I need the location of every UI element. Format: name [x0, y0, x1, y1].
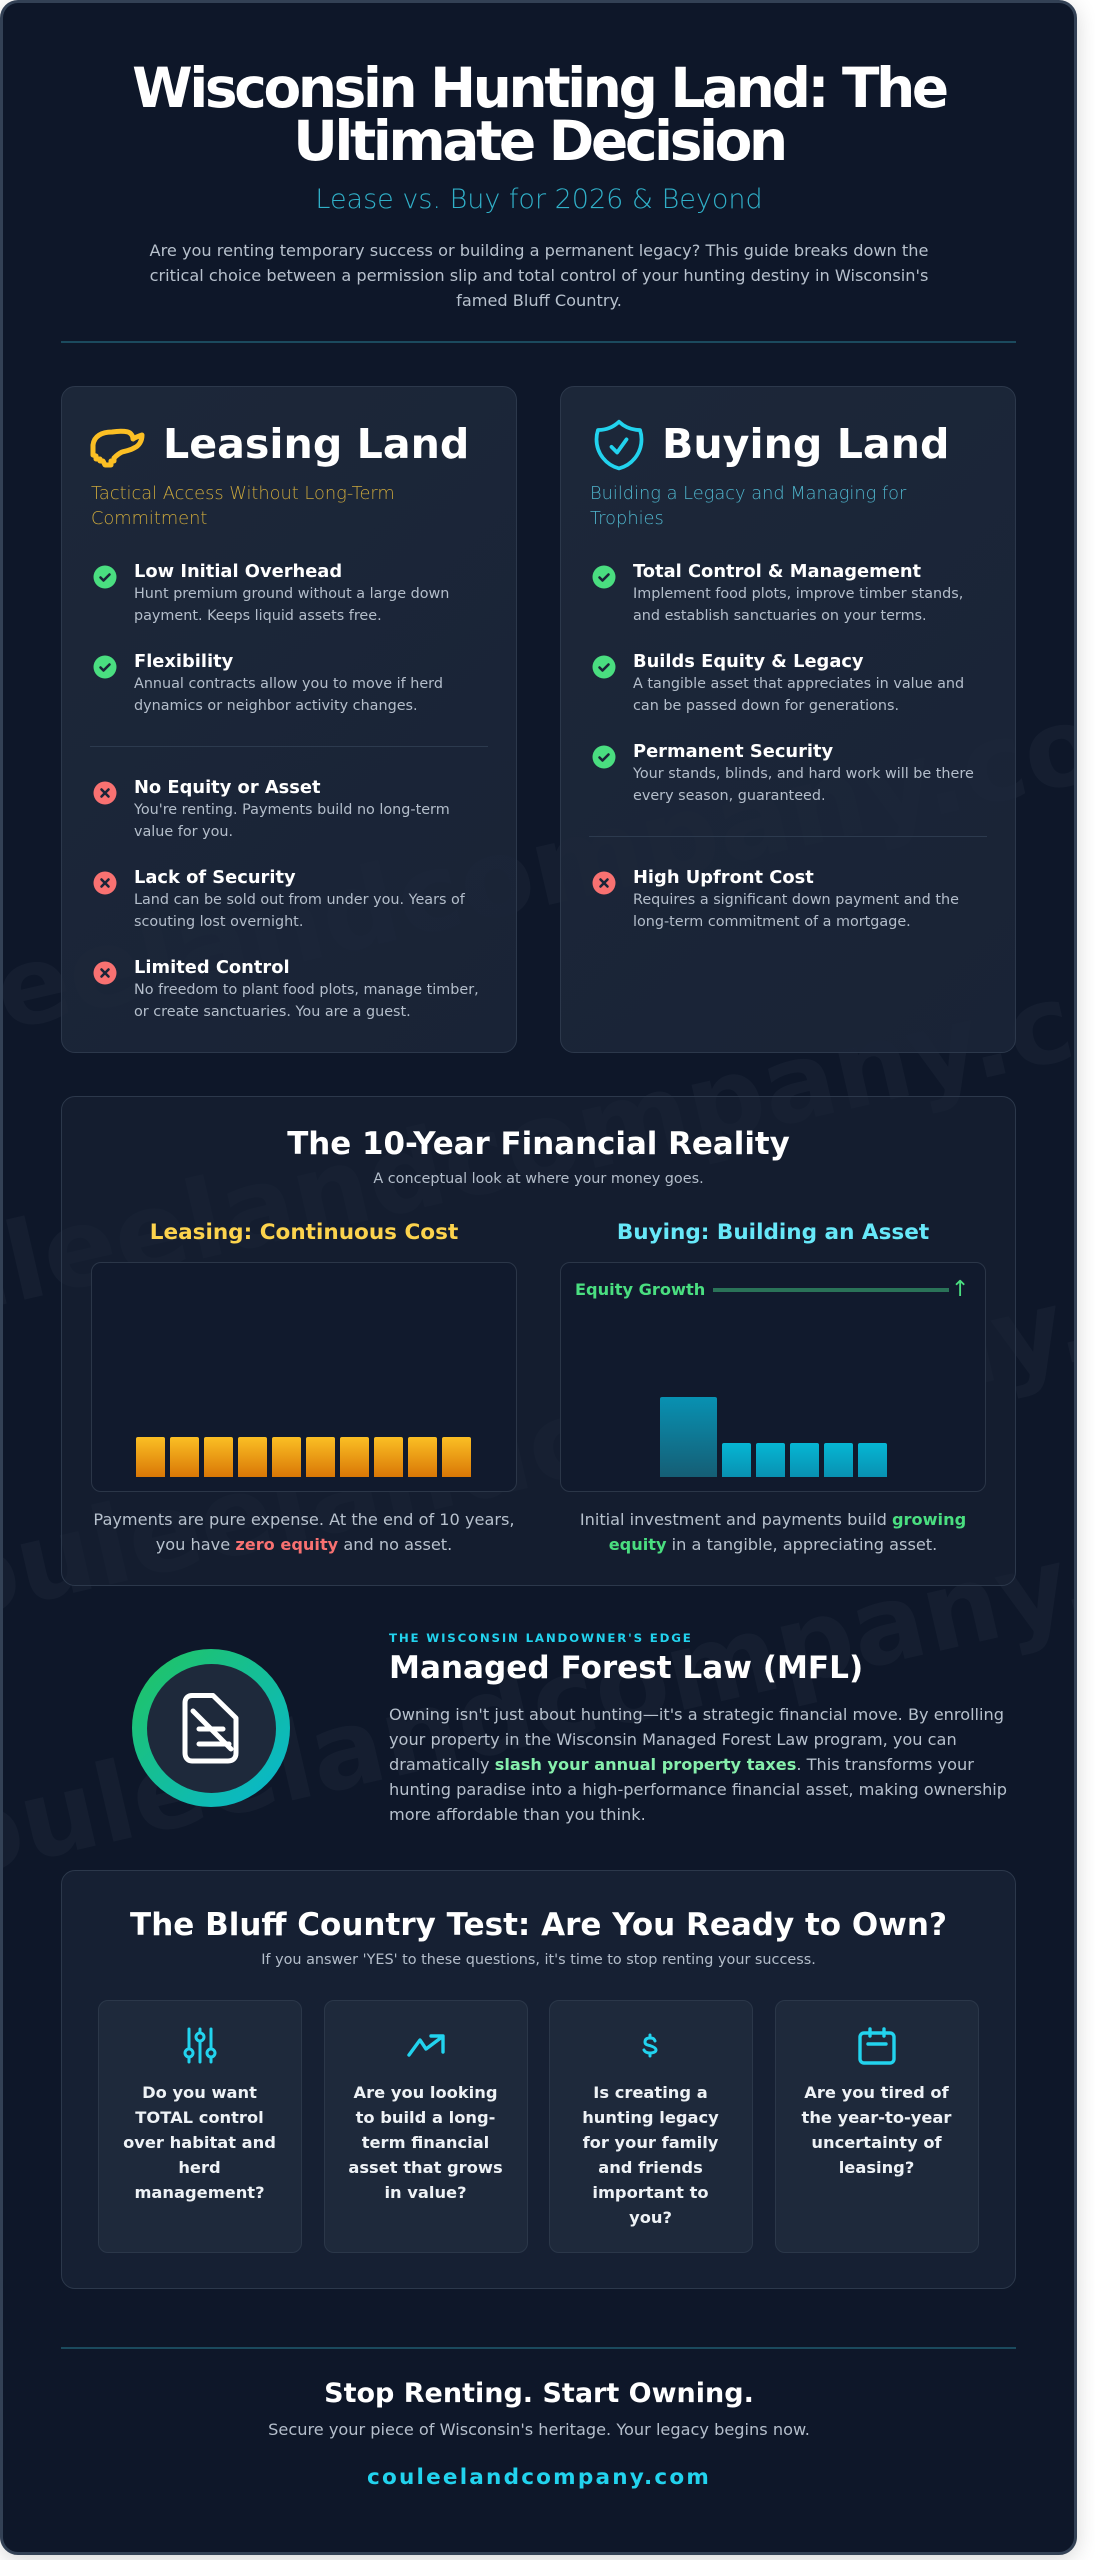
subheading: leasing: Commitment [91, 508, 207, 529]
chart title: leasing: Leasing: Continuous Cost [150, 1220, 458, 1245]
caption: buying: Initial investment and payments build growing [580, 1510, 966, 1528]
subheading: leasing [91, 483, 395, 529]
con: limited control: or create sanctuaries. You are a guest. [134, 1004, 411, 1020]
heading: leasing land: Leasing Land [163, 420, 469, 468]
con: limited control: Limited Control [134, 957, 290, 978]
pro: low initial overhead: Low Initial Overhead [134, 561, 342, 582]
question card: control: TOTAL control [135, 2108, 264, 2127]
subheading: financial reality: A conceptual look at where your money goes. [373, 1171, 704, 1187]
icon: trending up [407, 2034, 445, 2057]
question card: asset: Are you looking [353, 2083, 498, 2102]
equity arrow: ↑ [951, 1277, 969, 1302]
caption: leasing [93, 1510, 515, 1554]
body: MFL [389, 1704, 1007, 1824]
question card: control: over habitat and [123, 2133, 276, 2152]
body: MFL: Owning isn't just about hunting—it's a strategic financial move. By enrolling [389, 1704, 1004, 1724]
intro paragraph: critical choice between a permission slip and total control of your hunting destiny in Wisconsin's [150, 266, 928, 285]
caption: leasing: you have zero equity and no asset. [156, 1535, 452, 1554]
question card: uncertainty: leasing? [839, 2158, 914, 2177]
chart title: buying: Buying: Building an Asset [617, 1220, 929, 1245]
panel: buying land [560, 386, 1016, 1053]
pro: total control: Total Control & Management [633, 561, 921, 582]
pro: flexibility [94, 651, 443, 714]
con: lack of security [94, 867, 466, 930]
question card: legacy: you? [629, 2208, 672, 2227]
question card: legacy: important to [592, 2183, 709, 2202]
con: high upfront cost: long-term commitment of a mortgage. [633, 914, 911, 930]
pro: builds equity: A tangible asset that appreciates in value and [633, 676, 964, 692]
pro: flexibility: Annual contracts allow you to move if herd [134, 676, 443, 692]
title: Wisconsin Hunting Land: The [132, 56, 946, 120]
pro: permanent security: Your stands, blinds, and hard work will be there [633, 766, 974, 782]
question card: asset: to build a long- [356, 2108, 495, 2127]
con: lack of security: Lack of Security [134, 867, 296, 888]
title: Ultimate Decision [293, 109, 785, 173]
subheading: buying: Trophies [590, 508, 664, 529]
title [132, 56, 946, 173]
header divider [61, 341, 1016, 343]
question card: legacy: and friends [598, 2158, 703, 2177]
con: high upfront cost [592, 867, 959, 930]
icon: calendar [858, 2027, 896, 2065]
caption: buying: equity in a tangible, appreciating asset. [609, 1535, 937, 1554]
con: no equity or asset: value for you. [134, 824, 233, 840]
pro: flexibility: Flexibility [134, 651, 233, 672]
footer website: couleelandcompany.com [367, 2465, 711, 2490]
panel: leasing land [61, 386, 517, 1053]
icon: leasing [90, 428, 144, 468]
question card: legacy: hunting legacy [582, 2108, 719, 2127]
con: limited control: No freedom to plant food plots, manage timber, [134, 982, 479, 998]
panel: 10-year financial reality [61, 1096, 1016, 1586]
pro: total control [592, 561, 963, 624]
question card: uncertainty: the year-to-year [802, 2108, 951, 2127]
bar chart: leasing [91, 1262, 517, 1492]
con: limited control [94, 957, 479, 1020]
question card: legacy [549, 2000, 753, 2253]
con: high upfront cost: High Upfront Cost [633, 867, 814, 888]
con: no equity or asset [94, 777, 450, 840]
subheading: buying: Building a Legacy and Managing for [590, 483, 906, 504]
pro: builds equity [592, 651, 964, 714]
caption: leasing: Payments are pure expense. At the end of 10 years, [93, 1510, 515, 1528]
pro: flexibility: dynamics or neighbor activity changes. [134, 698, 418, 714]
question card: control: herd [178, 2158, 221, 2177]
pro: builds equity: can be passed down for generations. [633, 698, 899, 714]
question card: legacy: for your family [583, 2133, 718, 2152]
body: MFL: more affordable than you think. [389, 1805, 646, 1824]
subtitle: Lease vs. Buy for 2026 & Beyond [315, 184, 763, 215]
question card: uncertainty [775, 2000, 979, 2253]
question card: control: Do you want [142, 2083, 257, 2102]
intro paragraph: Are you renting temporary success or building a permanent legacy? This guide breaks down the [150, 240, 928, 260]
panel: bluff country test [61, 1870, 1016, 2289]
equity growth label: Equity Growth [575, 1280, 705, 1299]
pro: permanent security: every season, guaranteed. [633, 788, 826, 804]
icon: MFL tax badge [132, 1649, 290, 1807]
pro: permanent security: Permanent Security [633, 741, 833, 762]
intro paragraph: famed Bluff Country. [456, 291, 622, 310]
subheading: bluff country test: If you answer 'YES' to these questions, it's time to stop renting your success. [261, 1952, 816, 1968]
heading: financial reality: The 10-Year Financial Reality [287, 1126, 790, 1162]
pro: total control: and establish sanctuaries on your terms. [633, 608, 927, 624]
eyebrow: THE WISCONSIN LANDOWNER'S EDGE [389, 1631, 693, 1645]
question card: asset: term financial [362, 2133, 489, 2152]
pro: low initial overhead [94, 561, 449, 624]
pro: permanent security [592, 741, 974, 804]
body: MFL: hunting paradise into a high-performance financial asset, making ownership [389, 1780, 1007, 1799]
question card: control: management? [134, 2183, 265, 2202]
question card: uncertainty: Are you tired of [804, 2083, 949, 2102]
icon: sliders [184, 2028, 216, 2064]
subheading: leasing: Tactical Access Without Long-Term [91, 483, 395, 504]
caption: buying [580, 1510, 966, 1554]
footer subline: Secure your piece of Wisconsin's heritage. Your legacy begins now. [268, 2420, 810, 2439]
pro: builds equity: Builds Equity & Legacy [633, 651, 864, 672]
footer headline: Stop Renting. Start Owning. [324, 2378, 754, 2409]
con: high upfront cost: Requires a significant down payment and the [633, 892, 959, 908]
pro: low initial overhead: Hunt premium ground without a large down [134, 586, 449, 602]
icon: shield check [594, 420, 644, 470]
heading: MFL: Managed Forest Law (MFL) [389, 1650, 863, 1686]
question card: uncertainty: uncertainty of [811, 2133, 942, 2152]
question card: asset: asset that grows [348, 2158, 503, 2177]
question card: asset: in value? [384, 2183, 467, 2202]
bar chart: buying [560, 1262, 986, 1492]
header [61, 56, 1016, 343]
con: lack of security: Land can be sold out from under you. Years of [134, 892, 465, 908]
intro paragraph [150, 240, 928, 310]
icon: dollar [642, 2034, 658, 2058]
MFL text block [389, 1631, 1007, 1824]
con: no equity or asset: No Equity or Asset [134, 777, 321, 798]
body: MFL: dramatically slash your annual property taxes. This transforms your [389, 1755, 974, 1774]
subheading: buying [590, 483, 906, 529]
body: MFL: your property in the Wisconsin Managed Forest Law program, you can [389, 1730, 957, 1749]
con: lack of security: scouting lost overnight. [134, 914, 303, 930]
pro: total control: Implement food plots, improve timber stands, [633, 586, 963, 602]
heading: buying land: Buying Land [662, 420, 949, 468]
question card: asset [324, 2000, 528, 2253]
con: no equity or asset: You're renting. Payments build no long-term [134, 802, 450, 818]
heading: bluff country test: The Bluff Country Test: Are You Ready to Own? [130, 1907, 947, 1943]
question card: legacy: Is creating a [593, 2083, 708, 2102]
pro: low initial overhead: payment. Keeps liquid assets free. [134, 608, 382, 624]
question card: control [98, 2000, 302, 2253]
